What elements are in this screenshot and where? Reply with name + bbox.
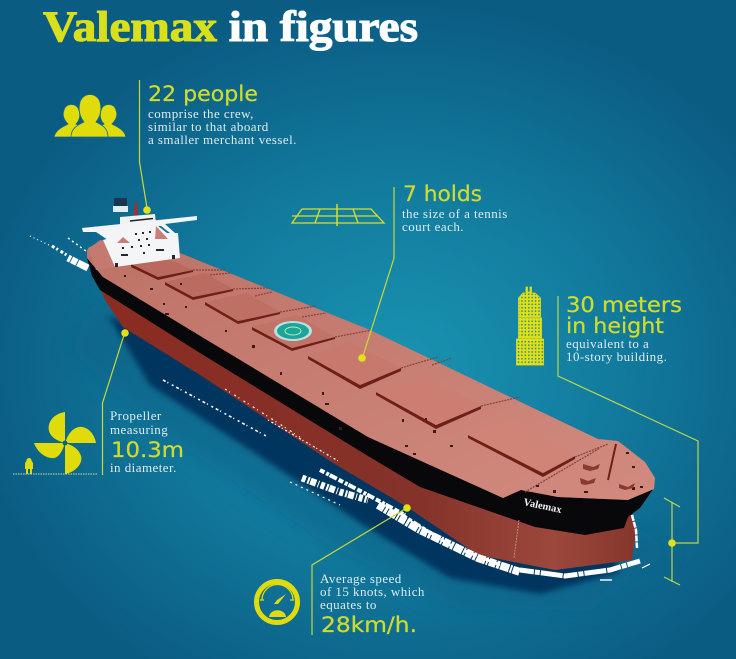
funnel — [113, 198, 128, 220]
windows — [115, 231, 175, 267]
connector dot — [403, 504, 411, 512]
callout: crew — [54, 80, 297, 214]
heading line 2: in height — [566, 314, 664, 338]
connector dot — [143, 206, 151, 214]
cargo holds — [131, 258, 575, 477]
hold 5 — [308, 342, 401, 389]
ship — [82, 198, 655, 570]
figure: 28km/h. — [321, 613, 417, 637]
pink deck insets — [117, 237, 130, 243]
description: 10-story building. — [566, 349, 667, 364]
hold 1 — [131, 258, 193, 280]
description: court each. — [402, 219, 464, 234]
accommodation block — [103, 222, 180, 267]
bow fittings — [580, 464, 635, 490]
connector line — [102, 335, 124, 475]
bow mast — [608, 444, 616, 480]
superstructure — [82, 198, 197, 270]
connector dot — [121, 329, 129, 337]
connector line — [363, 187, 394, 356]
wing bridge with trusses — [82, 216, 197, 240]
connector line — [312, 509, 405, 635]
description: equivalent to a — [566, 336, 649, 351]
mast — [133, 202, 138, 215]
ship shadow on water — [70, 300, 670, 610]
connector line — [140, 80, 147, 208]
description end: in diameter. — [110, 460, 177, 475]
hold 4 with helipad — [252, 315, 335, 351]
upper level — [120, 214, 156, 226]
callout: speed — [256, 504, 425, 637]
description: Propeller — [110, 408, 162, 423]
stern wake — [68, 258, 88, 268]
heading: 30 meters — [566, 293, 682, 317]
description: a smaller merchant vessel. — [148, 132, 297, 147]
hold 7 — [468, 418, 575, 477]
description: measuring — [110, 422, 168, 437]
hull: black band — [87, 258, 654, 535]
icon: building — [516, 287, 544, 365]
callout: holds — [292, 182, 508, 362]
connector dot — [668, 539, 676, 547]
callout: height — [516, 287, 698, 585]
description: the size of a tennis — [402, 206, 508, 221]
icon: people — [54, 94, 126, 137]
description: equates to — [320, 597, 377, 612]
deck rails and fittings — [193, 270, 608, 492]
icon: propeller — [34, 412, 96, 474]
callout: propeller — [13, 329, 184, 475]
description: of 15 knots, which — [320, 584, 425, 599]
hold 2 — [165, 273, 233, 300]
wake foam — [30, 236, 650, 580]
hold 6 — [376, 378, 481, 429]
description: comprise the crew, — [148, 106, 254, 121]
connector dot — [358, 354, 366, 362]
side wake — [163, 380, 268, 437]
hull: red lower section — [92, 270, 636, 570]
title: Valemax in figures — [43, 4, 418, 51]
ground line — [13, 473, 98, 475]
bow wave — [378, 505, 520, 572]
ship name: Valemax — [522, 497, 563, 516]
figure: 10.3m — [111, 438, 184, 462]
icon: person for scale — [25, 458, 33, 474]
connector line — [558, 296, 698, 543]
hull draft marks — [514, 520, 519, 558]
icon: gauge — [256, 582, 298, 622]
icon: tennis court — [292, 204, 384, 226]
stern deck — [88, 240, 115, 270]
heading: 22 people — [148, 82, 258, 106]
heading: 7 holds — [403, 182, 482, 206]
deck — [87, 240, 655, 500]
description: Average speed — [320, 571, 402, 586]
hold 3 — [205, 293, 280, 324]
height bracket — [664, 498, 680, 585]
description: similar to that aboard — [148, 119, 269, 134]
